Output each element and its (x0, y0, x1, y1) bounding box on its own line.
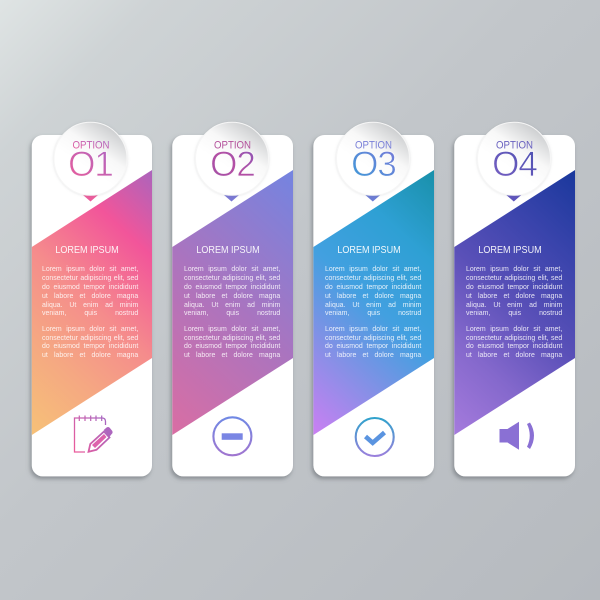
icon: minus circle (213, 417, 251, 455)
body text (325, 264, 422, 317)
pointer (365, 195, 380, 202)
body text: do eiusmod tempor incididunt (325, 341, 421, 350)
card body (454, 135, 575, 476)
body text: do eiusmod tempor incididunt (325, 282, 421, 291)
card body (172, 135, 293, 476)
option number: O4 (492, 145, 537, 184)
body text: do eiusmod tempor incididunt (466, 341, 562, 350)
option label: OPTION (72, 140, 110, 152)
pointer (83, 195, 98, 202)
body text: consectetur adipiscing elit, sed (184, 273, 280, 282)
panel: option 3 (310, 122, 435, 481)
body text (466, 264, 562, 317)
body text: ut labore et dolore magna (325, 291, 421, 300)
body text: do eiusmod tempor incididunt (184, 341, 280, 350)
body text: do eiusmod tempor incididunt (184, 282, 280, 291)
diagonal gradient band (313, 170, 434, 435)
body text: Lorem ipsum dolor sit amet, (325, 324, 421, 333)
body text: aliqua. Ut enim ad minim (42, 300, 138, 309)
icon: speaker (500, 422, 534, 450)
body text: Lorem ipsum dolor sit amet, (184, 264, 280, 273)
option number: O1 (68, 145, 113, 184)
body text (184, 264, 280, 317)
body text (184, 324, 280, 359)
body text: ut labore et dolore magna (42, 350, 138, 359)
panel: option 2 (168, 122, 294, 481)
body text: ut labore et dolore magna (184, 350, 280, 359)
body text: consectetur adipiscing elit, sed (42, 273, 138, 282)
option label: OPTION (496, 140, 533, 152)
heading: LOREM IPSUM (55, 245, 119, 256)
body text: aliqua. Ut enim ad minim (466, 300, 562, 309)
badge circle (478, 122, 550, 195)
badge circle (196, 122, 268, 195)
badge circle (336, 122, 410, 195)
heading: LOREM IPSUM (337, 245, 401, 256)
body text: do eiusmod tempor incididunt (466, 282, 562, 291)
body text: Lorem ipsum dolor sit amet, (466, 324, 562, 333)
body text: do eiusmod tempor incididunt (42, 282, 138, 291)
panel: option 4 (450, 122, 576, 481)
body text: Lorem ipsum dolor sit amet, (466, 264, 562, 273)
body text: consectetur adipiscing elit, sed (184, 333, 280, 342)
body text: aliqua. Ut enim ad minim (325, 300, 421, 309)
card body (32, 135, 152, 476)
icon: check circle (356, 418, 394, 456)
body text: ut labore et dolore magna (184, 291, 280, 300)
diagonal gradient band (454, 170, 575, 435)
option label: OPTION (355, 140, 392, 152)
body text: ut labore et dolore magna (466, 291, 562, 300)
pointer (506, 195, 521, 202)
body text (466, 324, 562, 359)
icon: notepad and pencil (74, 416, 112, 452)
body text: Lorem ipsum dolor sit amet, (325, 264, 421, 273)
heading: LOREM IPSUM (478, 245, 542, 256)
panel: option 1 (28, 122, 153, 481)
diagonal gradient band (172, 170, 293, 435)
body text: Lorem ipsum dolor sit amet, (184, 324, 280, 333)
body text: consectetur adipiscing elit, sed (325, 273, 421, 282)
body text: veniam, quis nostrud (325, 308, 421, 317)
card body (313, 135, 434, 476)
body text: veniam, quis nostrud (42, 308, 138, 317)
body text: Lorem ipsum dolor sit amet, (42, 264, 138, 273)
body text: consectetur adipiscing elit, sed (42, 333, 138, 342)
body text: consectetur adipiscing elit, sed (325, 333, 421, 342)
body text: consectetur adipiscing elit, sed (466, 273, 562, 282)
body text: do eiusmod tempor incididunt (42, 341, 138, 350)
body text: ut labore et dolore magna (466, 350, 562, 359)
option label: OPTION (214, 140, 251, 152)
body text: veniam, quis nostrud (184, 308, 280, 317)
option number: O3 (351, 145, 396, 184)
diagonal gradient band (32, 170, 152, 435)
body text (42, 264, 138, 317)
badge circle (54, 122, 127, 195)
body text: Lorem ipsum dolor sit amet, (42, 324, 138, 333)
body text: ut labore et dolore magna (325, 350, 421, 359)
option number: O2 (210, 145, 255, 184)
body text (42, 324, 138, 359)
pointer (224, 195, 239, 202)
body text: ut labore et dolore magna (42, 291, 138, 300)
heading: LOREM IPSUM (196, 245, 260, 256)
body text: aliqua. Ut enim ad minim (184, 300, 280, 309)
body text: veniam, quis nostrud (466, 308, 562, 317)
body text (325, 324, 422, 359)
body text: consectetur adipiscing elit, sed (466, 333, 562, 342)
